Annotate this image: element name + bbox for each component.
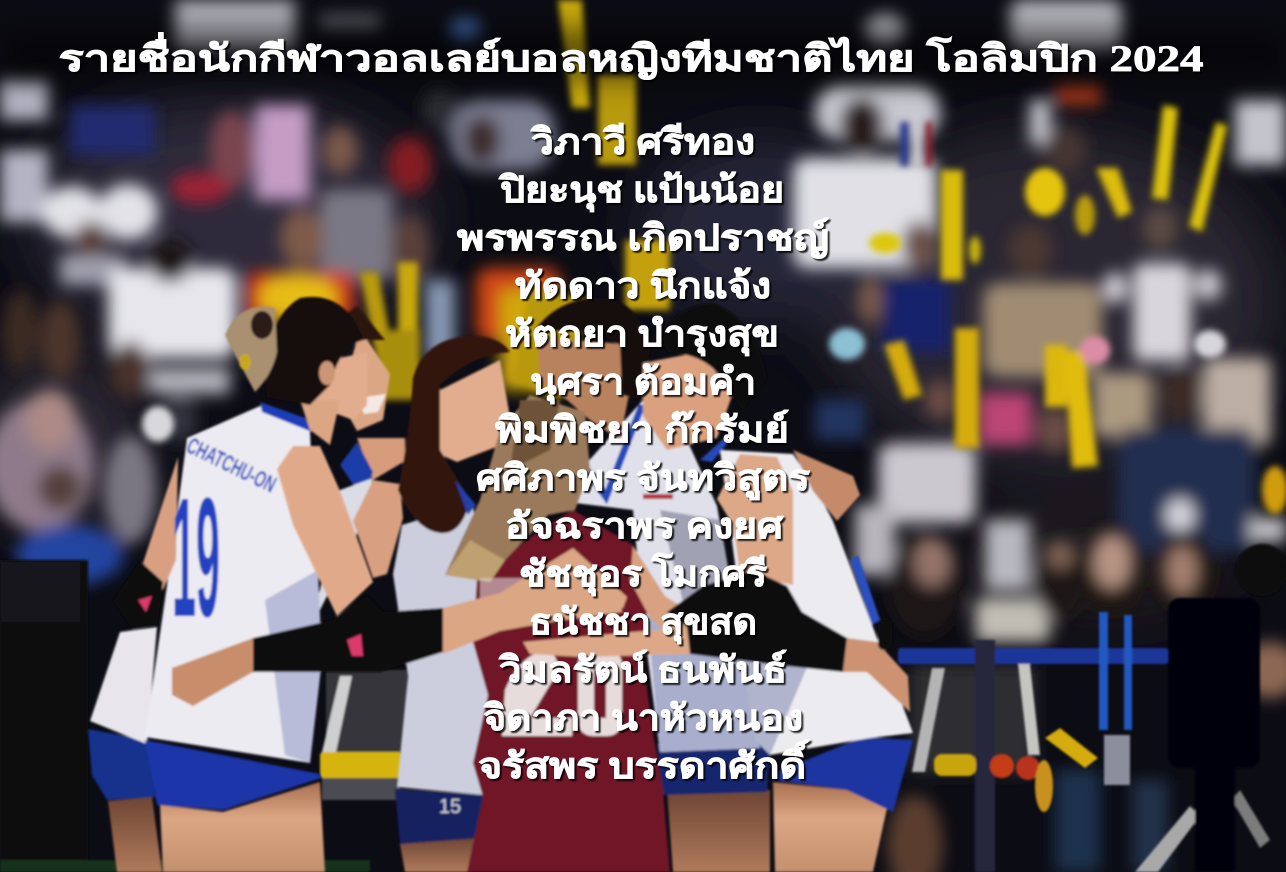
name 11: ธนัชชา สุขสด xyxy=(529,602,757,645)
crowd: left stands xyxy=(0,0,560,585)
crowd: right stands xyxy=(793,0,1286,872)
name 4: ทัดดาว นึกแจ้ง xyxy=(515,266,771,306)
photo: volleyball players group xyxy=(88,297,913,872)
name 6: นุศรา ต้อมคำ xyxy=(530,362,756,405)
name 10: ชัชชุอร โมกศรี xyxy=(519,552,768,597)
player: right front xyxy=(523,303,913,872)
name 14: จรัสพร บรรดาศักดิ์ xyxy=(478,739,811,786)
jersey number 15 on shorts: 15 xyxy=(439,796,461,818)
name 13: จิดาภา นาหัวหนอง xyxy=(483,698,803,738)
jersey name: CHATCHU-ON xyxy=(183,432,280,498)
jersey name and number 20 xyxy=(480,578,622,736)
player: far left behind xyxy=(88,627,162,872)
name 9: อัจฉราพร คงยศ xyxy=(505,506,784,546)
top dark vignette xyxy=(0,28,1286,80)
player: number 19 front left xyxy=(113,297,622,872)
crowd: base tone patches xyxy=(0,100,1280,620)
name 3: พรพรรณ เกิดปราชญ์ xyxy=(457,217,829,259)
name 5: หัตถยา บำรุงสุข xyxy=(505,314,779,357)
player: maroon libero back view xyxy=(445,395,670,872)
player name list xyxy=(457,122,829,786)
yellow inflatable sticks xyxy=(142,0,1286,514)
name 1: วิภาวี ศรีทอง xyxy=(530,122,755,162)
player: second from left, smiling xyxy=(305,306,405,640)
name 2: ปิยะนุช แป้นน้อย xyxy=(498,170,784,213)
name 12: วิมลรัตน์ ธนพันธ์ xyxy=(498,649,787,690)
name 7: พิมพิชยา ก๊กรัมย์ xyxy=(495,409,789,450)
player: centre-left, number 15 xyxy=(353,336,514,872)
hand on maroon jersey xyxy=(500,548,627,622)
player: centre back xyxy=(535,298,770,872)
title: รายชื่อนักกีฬาวอลเลย์บอลหญิงทีมชาติไทย โอลิมปิก 2024 xyxy=(58,32,1204,80)
name 8: ศศิภาพร จันทวิสูตร xyxy=(476,458,811,501)
player: number 19 front left: 19 xyxy=(172,463,220,653)
barrier, seats and camera xyxy=(0,544,1286,872)
